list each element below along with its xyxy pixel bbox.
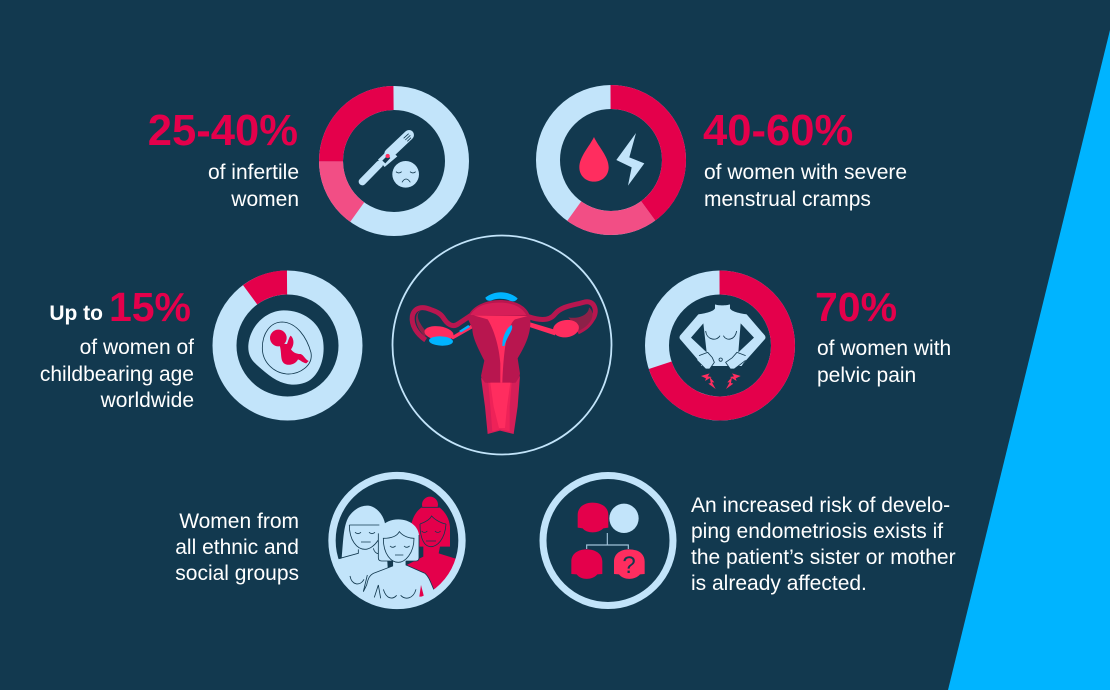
panel: family risk (543, 476, 956, 606)
donut chart: 40-60% (548, 97, 674, 223)
caption: women (230, 188, 299, 211)
percentage: 25-40% (148, 107, 298, 155)
caption: of women of (80, 336, 194, 359)
icon: pregnancy test and sad face (362, 134, 419, 188)
panel: infertile women (148, 98, 457, 224)
outline circle (392, 236, 612, 454)
caption: ping endometriosis exists if (691, 520, 943, 543)
donut chart: 25-40% (331, 98, 457, 224)
donut chart: up to 15% (224, 282, 350, 408)
caption: pelvic pain (817, 364, 916, 387)
caption: menstrual cramps (704, 188, 871, 211)
caption: all ethnic and (175, 536, 299, 559)
caption: worldwide (100, 389, 194, 412)
caption: of women with severe (704, 161, 907, 184)
ring (543, 476, 673, 606)
caption: of women with (817, 337, 951, 360)
caption: childbearing age (40, 363, 194, 386)
icon: three women in ring (330, 476, 462, 605)
caption: the patient’s sister or mother (691, 546, 956, 569)
percentage: 40-60% (703, 107, 853, 155)
icon: torso with pelvic pain (679, 304, 765, 389)
caption: social groups (175, 562, 299, 585)
icon: family tree: ? (622, 552, 636, 579)
left woman (338, 506, 388, 593)
caption: of infertile (208, 161, 299, 184)
right woman (422, 496, 438, 507)
caption: is already affected. (691, 572, 867, 595)
panel: central uterus illustration (392, 236, 612, 454)
icon: family tree (571, 503, 645, 579)
panel: ethnic and social groups (175, 476, 462, 605)
icon: blood drop and lightning (579, 133, 644, 186)
panel: severe menstrual cramps (548, 97, 907, 223)
front woman (378, 519, 434, 602)
donut chart: 70% (657, 282, 783, 408)
qualifier: Up to (49, 302, 103, 325)
percentage: 70% (815, 284, 897, 330)
icon: fetus in womb (248, 310, 324, 385)
blue corner wedge (948, 30, 1110, 690)
percentage: 15% (109, 284, 191, 330)
caption: Women from (179, 510, 299, 533)
panel: pelvic pain (657, 282, 951, 408)
icon: uterus (412, 292, 595, 434)
caption: An increased risk of develo- (691, 494, 950, 517)
panel: childbearing age (40, 282, 350, 412)
